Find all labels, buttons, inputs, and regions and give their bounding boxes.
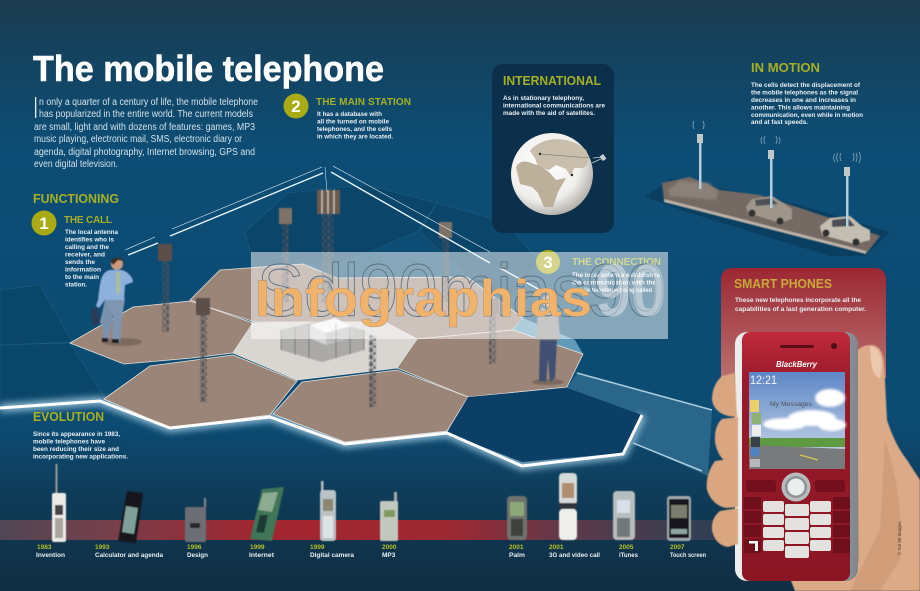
number 2: 2 bbox=[291, 97, 301, 116]
evolution text: incorporating new applications. bbox=[33, 454, 128, 460]
photo credit: © Sol 90 Images bbox=[896, 521, 902, 555]
phone 2007 bbox=[667, 496, 691, 541]
person: receiver bbox=[532, 295, 564, 385]
section 2: the main station bbox=[284, 94, 411, 140]
car blurred bbox=[668, 181, 718, 200]
signal lines toward phone bbox=[577, 373, 712, 471]
intro text: has popularized in the entire world. The current models bbox=[39, 109, 253, 120]
in motion text: and at fast speeds. bbox=[751, 119, 808, 126]
1996: Design bbox=[187, 552, 208, 559]
road scene bbox=[645, 121, 890, 256]
phone 2001 palm bbox=[507, 496, 527, 540]
hand fingers bbox=[707, 373, 738, 547]
lighter band toward phone bbox=[567, 373, 712, 476]
section 3: the connection bbox=[536, 250, 661, 294]
intro text: music playing, electronic mail, SMS, electronic diary or bbox=[34, 134, 243, 145]
2000: MP3 bbox=[382, 552, 396, 559]
top buttons bbox=[746, 480, 845, 492]
tower 3 bbox=[279, 208, 292, 302]
2001 palm bbox=[509, 544, 525, 559]
1999 internet: 1999 bbox=[250, 544, 265, 551]
body: all the turned on mobile bbox=[317, 118, 389, 126]
hand back bbox=[790, 345, 920, 591]
smartphone bbox=[735, 332, 858, 581]
heading: INTERNATIONAL bbox=[503, 73, 601, 88]
road cell shadow bbox=[645, 178, 890, 256]
floor white edge bbox=[0, 401, 642, 466]
heading: THE CONNECTION bbox=[572, 257, 661, 268]
earpiece bbox=[780, 345, 814, 348]
phone 2001 flip bbox=[559, 473, 577, 540]
2007: 2007 bbox=[670, 544, 685, 551]
1999 internet bbox=[249, 544, 275, 559]
intro text: agenda, digital photography, Internet browsing, GPS and bbox=[34, 147, 255, 158]
phone 1993 bbox=[118, 491, 143, 543]
1999 camera: Digital camera bbox=[310, 552, 354, 559]
body: in which they are located. bbox=[317, 134, 393, 140]
heading: SMART PHONES bbox=[734, 276, 832, 291]
trackball bbox=[782, 472, 810, 502]
2005: iTunes bbox=[619, 552, 638, 559]
phone 1999 internet bbox=[250, 487, 284, 541]
2001 video: 3G and video call bbox=[549, 552, 600, 559]
2007 bbox=[670, 544, 706, 559]
2005: 2005 bbox=[619, 544, 634, 551]
background cell outlines bbox=[0, 185, 540, 405]
body: receiver, and bbox=[65, 252, 105, 258]
body bbox=[572, 272, 660, 294]
functioning heading: FUNCTIONING bbox=[33, 191, 119, 206]
body bbox=[735, 332, 858, 581]
car middle bbox=[746, 196, 792, 224]
in motion text: the mobile telephones as the signal bbox=[751, 90, 858, 96]
1999 camera: 1999 bbox=[310, 544, 325, 551]
2001 palm: 2001 bbox=[509, 544, 524, 551]
timeline labels bbox=[36, 544, 706, 559]
panel: smart phones bbox=[721, 268, 886, 378]
watermark panel bbox=[251, 249, 668, 339]
phone 1996 bbox=[185, 498, 206, 542]
clock: 12:21 bbox=[750, 373, 777, 387]
body: sends the bbox=[65, 259, 95, 266]
evolution text: mobile telephones have bbox=[33, 438, 105, 446]
antenna towers bbox=[158, 190, 499, 407]
signal arrows bbox=[125, 166, 540, 290]
number 3: 3 bbox=[543, 253, 553, 272]
ring finger bbox=[707, 458, 738, 508]
1996 bbox=[187, 544, 208, 559]
1983 bbox=[36, 544, 65, 559]
tower 6 bbox=[486, 298, 499, 364]
tower 5 bbox=[439, 222, 452, 302]
body bbox=[317, 111, 393, 140]
2001 video: 2001 bbox=[549, 544, 564, 551]
road bbox=[662, 177, 880, 254]
intro text: n only a quarter of a century of life, the mobile telephone bbox=[39, 97, 258, 108]
app icons bbox=[750, 400, 761, 467]
body bbox=[65, 229, 118, 288]
evolution text: been reducing their size and bbox=[33, 446, 119, 453]
tower 1 bbox=[158, 244, 172, 332]
car front bbox=[820, 216, 870, 246]
little finger bbox=[712, 508, 738, 547]
phone 1999 camera bbox=[320, 481, 336, 541]
body bbox=[503, 95, 605, 117]
body: As in stationary telephony, bbox=[503, 95, 584, 102]
watermark right digits: 90 bbox=[596, 249, 666, 332]
body: mobile telephone being called bbox=[572, 287, 652, 294]
satellite bbox=[592, 155, 606, 163]
panel: international bbox=[492, 64, 614, 233]
2000 bbox=[382, 544, 397, 559]
in motion heading: IN MOTION bbox=[751, 60, 820, 75]
tower 7 bbox=[369, 335, 376, 407]
keypad bbox=[744, 497, 850, 558]
message text: My Messages bbox=[770, 402, 812, 408]
1999 internet: Internet bbox=[249, 552, 275, 559]
1983: Invention bbox=[36, 552, 65, 559]
evolution text: Since its appearance in 1983, bbox=[33, 431, 120, 438]
person: caller bbox=[91, 258, 142, 346]
body: to the main bbox=[65, 274, 99, 281]
body: The local antenna bbox=[65, 229, 118, 236]
body: capabilities of a last generation computer. bbox=[735, 306, 866, 313]
2001 video bbox=[549, 544, 600, 559]
glow under floor edge bbox=[0, 401, 642, 466]
phone 2005 bbox=[613, 491, 635, 540]
intro text bbox=[34, 97, 258, 170]
intro text: are small, light and with dozens of features: games, MP3 bbox=[34, 122, 255, 133]
1999 camera bbox=[310, 544, 354, 559]
body: These new telephones incorporate all the bbox=[735, 297, 861, 304]
screen bbox=[749, 372, 846, 469]
in motion text: decreases in one and increases in bbox=[751, 97, 856, 104]
in motion text: another. This allows maintaining bbox=[751, 104, 850, 112]
camera bbox=[831, 343, 837, 349]
body: station. bbox=[65, 282, 87, 288]
in motion text: communication, even while in motion bbox=[751, 112, 863, 119]
heading: THE CALL bbox=[64, 215, 112, 226]
index finger bbox=[712, 373, 737, 417]
base station building bbox=[281, 318, 364, 362]
2005 bbox=[619, 544, 638, 559]
2007: Touch screen bbox=[670, 552, 706, 559]
tower 2 bbox=[196, 298, 210, 402]
timeline band bbox=[0, 520, 730, 540]
signal waves bbox=[693, 121, 860, 163]
2001 palm: Palm bbox=[509, 552, 525, 559]
body bbox=[735, 297, 866, 313]
in motion text: The cells detect the displacement of bbox=[751, 82, 861, 89]
section 1: the call bbox=[32, 210, 118, 288]
body: made with the aid of satellites. bbox=[503, 110, 595, 117]
body: telephones, and the cells bbox=[317, 126, 392, 133]
body: identifies who is bbox=[65, 236, 114, 244]
evolution heading: EVOLUTION bbox=[33, 409, 104, 424]
body: the communication with the bbox=[572, 280, 656, 286]
hexagonal cell floor bbox=[70, 264, 642, 462]
2000: 2000 bbox=[382, 544, 397, 551]
watermark orange text: Infographias bbox=[255, 270, 592, 328]
1993 bbox=[95, 544, 163, 559]
heading: THE MAIN STATION bbox=[316, 97, 411, 108]
in motion text bbox=[751, 82, 863, 126]
main tower bbox=[317, 190, 340, 302]
1983: 1983 bbox=[37, 544, 52, 551]
globe bbox=[511, 133, 593, 215]
poles bbox=[697, 134, 850, 227]
phone 1983 bbox=[52, 464, 66, 542]
evolution text bbox=[33, 431, 128, 460]
1996: 1996 bbox=[187, 544, 202, 551]
body: information bbox=[65, 266, 101, 274]
number 1: 1 bbox=[39, 214, 49, 233]
brand: BlackBerry bbox=[776, 360, 818, 369]
intro text: even digital television. bbox=[34, 159, 118, 170]
1993: 1993 bbox=[95, 544, 110, 551]
title: The mobile telephone bbox=[33, 48, 384, 89]
body: calling and the bbox=[65, 244, 109, 251]
timeline phones bbox=[52, 464, 691, 543]
body: It has a database with bbox=[317, 111, 382, 118]
phone 2000 bbox=[380, 492, 398, 541]
body: international communications are bbox=[503, 102, 605, 110]
watermark outline text: Sdl90mias90 bbox=[257, 249, 665, 332]
middle finger bbox=[715, 417, 738, 463]
body: The local antenna establishes bbox=[572, 272, 660, 279]
1993: Calculator and agenda bbox=[95, 552, 163, 559]
